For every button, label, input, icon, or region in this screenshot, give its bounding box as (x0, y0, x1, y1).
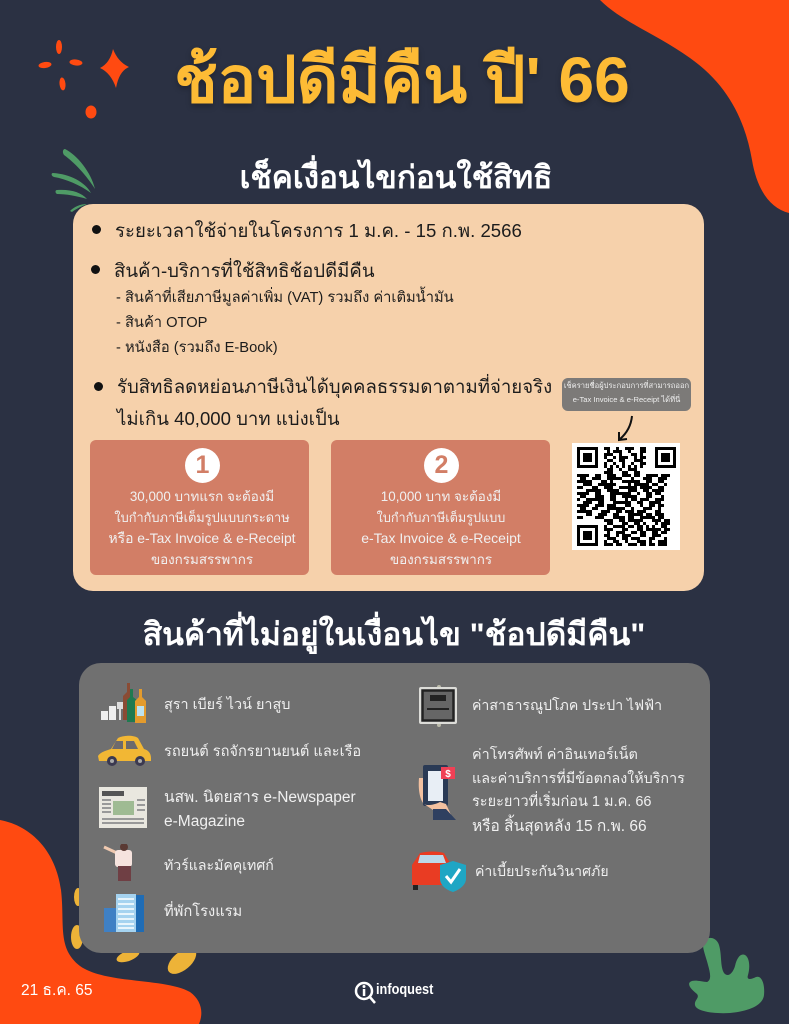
tooltip: QR note: เช็ครายชื่อผู้ประกอบการที่สามารถออก (564, 381, 689, 390)
icon: yellow car (98, 736, 151, 766)
icon: phone with bill (418, 765, 456, 820)
number badge 1 (185, 448, 220, 483)
title: ช้อปดีมีคืน ปี' 66 (174, 44, 630, 116)
item text: utilities: ค่าสาธารณูปโภค ประปา ไฟฟ้า (472, 697, 662, 713)
decoration: green leaf blob (689, 938, 764, 1014)
item text: insurance: ค่าเบี้ยประกันวินาศภัย (475, 863, 609, 879)
tooltip: QR note: e-Tax Invoice & e-Receipt ได้ที่นี่ (573, 395, 680, 404)
QR code (572, 443, 680, 550)
item text: vehicles: รถยนต์ รถจักรยานยนต์ และเรือ (164, 744, 361, 760)
icon: hotel building (104, 894, 144, 932)
number badge 2: 2 (435, 451, 448, 479)
card text 2: 10,000 บาท จะต้องมี (381, 489, 501, 504)
card text 2: ของกรมสรรพากร (390, 552, 492, 566)
icon: car with shield (412, 852, 466, 892)
sub-list: eligible goods: - สินค้า OTOP (116, 315, 207, 331)
card text 1: ของกรมสรรพากร (151, 552, 253, 566)
card text 2 (361, 489, 521, 566)
card text 1: 30,000 บาทแรก จะต้องมี (130, 489, 274, 504)
bullet: tax deduction: รับสิทธิลดหย่อนภาษีเงินได้บุคคลธรรมดาตามที่จ่ายจริง (117, 376, 552, 397)
arrow: to QR (618, 416, 633, 442)
icon: electric meter (419, 685, 457, 727)
card text 2: ใบกำกับภาษีเต็มรูปแบบ (377, 510, 505, 524)
card: first tier (90, 440, 309, 575)
item text: newspaper: e-Magazine (164, 812, 245, 830)
icon: phone with bill: $ (445, 769, 451, 780)
date: 21 ธ.ค. 65 (21, 982, 93, 999)
logo wordmark: infoquest (376, 981, 433, 998)
number badge 1: 1 (196, 451, 209, 479)
bullet: tax deduction (94, 374, 552, 429)
item text: hotel: ที่พักโรงแรม (164, 904, 242, 920)
item text: newspaper (164, 789, 356, 830)
icon: orange sparkles (38, 40, 129, 118)
bullet: period: ระยะเวลาใช้จ่ายในโครงการ 1 ม.ค. - 15 ก.พ. 2566 (115, 220, 522, 241)
item text: phone and internet (472, 745, 685, 836)
logo icon (354, 982, 376, 1004)
item text: phone and internet: ระยะยาวที่เริ่มก่อน 1 ม.ค. 66 (472, 794, 652, 810)
panel: excluded items (79, 663, 710, 953)
item text: phone and internet: หรือ สิ้นสุดหลัง 15 ก.พ. 66 (472, 818, 647, 834)
background blob: bottom left orange (0, 820, 202, 1024)
card text 2: e-Tax Invoice & e-Receipt (361, 530, 521, 546)
number badge 2 (424, 448, 459, 483)
item text: phone and internet: ค่าโทรศัพท์ ค่าอินเทอร์เน็ต (472, 747, 638, 763)
icon: newspaper (99, 787, 147, 828)
decoration: yellow petals (71, 888, 196, 974)
background blob: top right orange (600, 0, 789, 213)
bullet: tax deduction: ไม่เกิน 40,000 บาท แบ่งเป็น (117, 408, 340, 429)
heading: excluded items: สินค้าที่ไม่อยู่ในเงื่อนไข "ช้อปดีมีคืน" (143, 616, 645, 652)
icon: tour guide (103, 844, 132, 881)
card text 1: หรือ e-Tax Invoice & e-Receipt (108, 530, 296, 546)
card text 1: ใบกำกับภาษีเต็มรูปแบบกระดาษ (114, 510, 290, 524)
card: second tier (331, 440, 550, 575)
panel: conditions (73, 204, 704, 591)
item text: tour: ทัวร์และมัคคุเทศก์ (164, 857, 274, 873)
sub-list: eligible goods (116, 286, 454, 356)
logo: infoquest (354, 981, 434, 1004)
icon: alcohol bottles (101, 683, 146, 723)
item text: alcohol: สุรา เบียร์ ไวน์ ยาสูบ (164, 697, 290, 713)
card text 1 (108, 489, 296, 566)
tooltip: QR note (562, 378, 691, 411)
item text: phone and internet: และค่าบริการที่มีข้อตกลงให้บริการ (472, 770, 685, 786)
icon: green grass strokes (52, 149, 95, 212)
sub-list: eligible goods: - สินค้าที่เสียภาษีมูลค่าเพิ่ม (VAT) รวมถึง ค่าเติมน้ำมัน (116, 290, 454, 306)
item text: newspaper: นสพ. นิตยสาร e-Newspaper (164, 789, 356, 806)
heading: check conditions: เช็คเงื่อนไขก่อนใช้สิทธิ (240, 159, 552, 195)
sub-list: eligible goods: - หนังสือ (รวมถึง E-Book) (116, 340, 278, 356)
bullet: eligible goods: สินค้า-บริการที่ใช้สิทธิช้อปดีมีคืน (114, 260, 375, 281)
